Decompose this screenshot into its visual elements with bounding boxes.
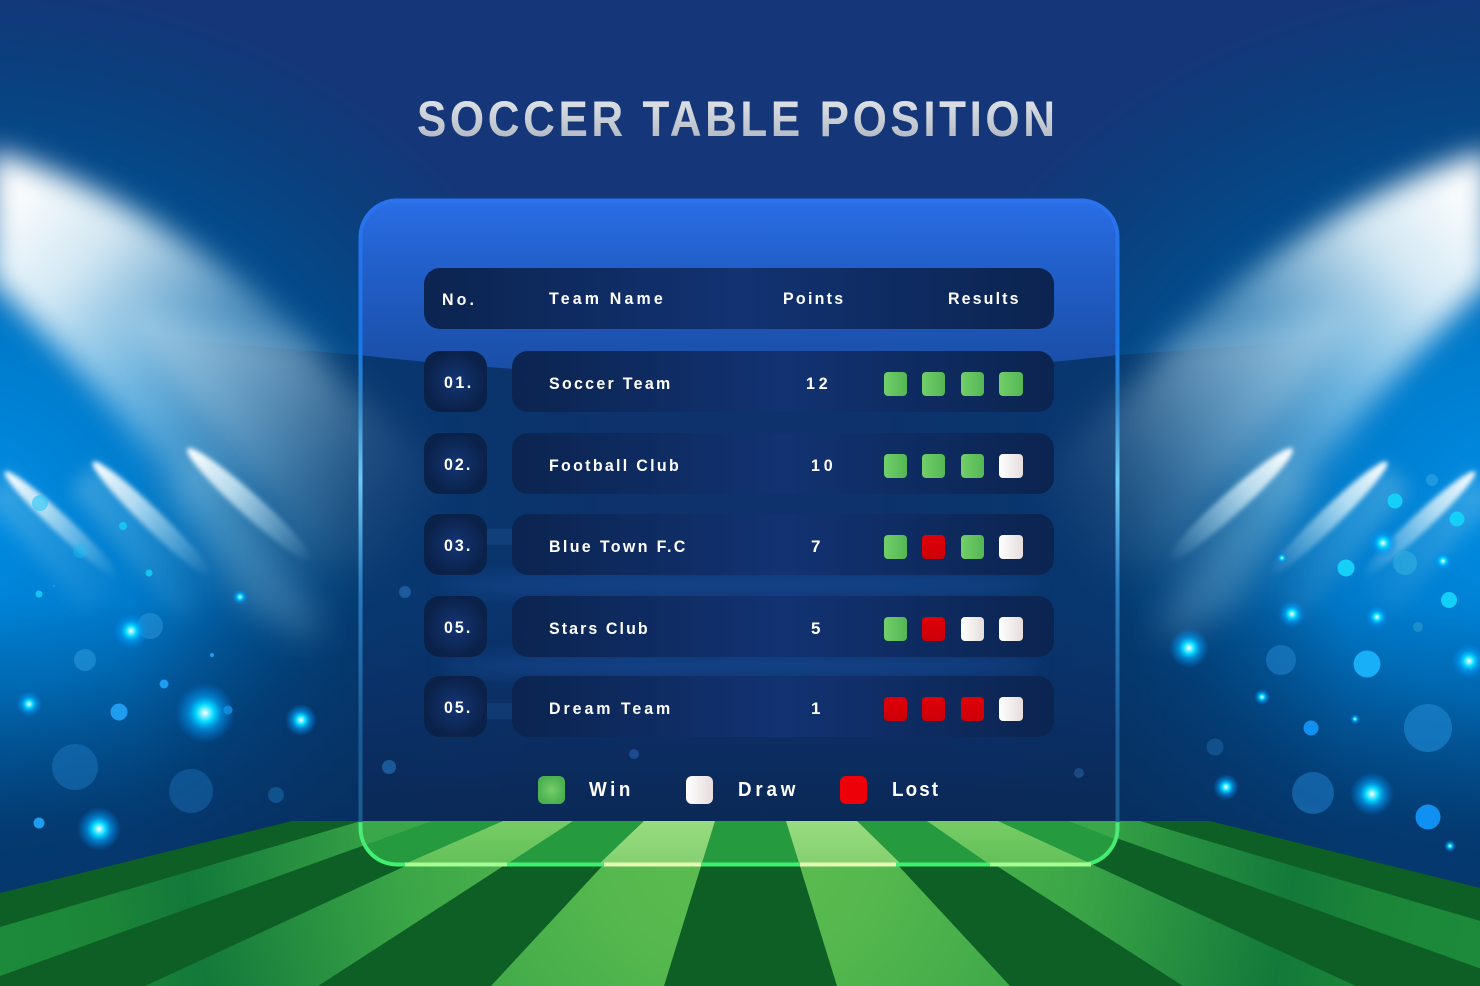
right floodlight beams bbox=[1040, 150, 1480, 650]
right crowd lights bbox=[1169, 474, 1480, 852]
table header: Results bbox=[948, 290, 1018, 308]
legend: Win bbox=[589, 778, 630, 801]
row 3: Blue Town F.C: Blue Town F.C bbox=[549, 538, 685, 556]
row 1: Soccer Team: 12 bbox=[806, 375, 828, 393]
row 1: Soccer Team: Soccer Team bbox=[549, 375, 670, 393]
row 3: Blue Town F.C bbox=[424, 514, 1054, 575]
row 2: Football Club bbox=[424, 433, 1054, 494]
table header: Team Name bbox=[549, 290, 663, 308]
left crowd lights bbox=[16, 495, 317, 851]
row 5: Dream Team: 05. bbox=[444, 699, 470, 717]
row 5: Dream Team: Dream Team bbox=[549, 700, 670, 718]
table header: No. bbox=[442, 291, 474, 309]
table header bbox=[424, 268, 1054, 329]
title: SOCCER TABLE POSITION bbox=[417, 90, 1055, 147]
row 5: Dream Team bbox=[424, 676, 1054, 737]
row 2: Football Club: Football Club bbox=[549, 457, 679, 475]
legend: Lost bbox=[892, 778, 939, 801]
row 4: Stars Club bbox=[424, 596, 1054, 657]
row 2: Football Club: 02. bbox=[444, 456, 470, 474]
row 2: Football Club: 10 bbox=[811, 457, 833, 475]
row 5: Dream Team: 1 bbox=[811, 699, 820, 718]
row 4: Stars Club: 5 bbox=[811, 619, 820, 638]
row 1: Soccer Team bbox=[424, 351, 1054, 412]
row 3: Blue Town F.C: 03. bbox=[444, 537, 470, 555]
table header: Points bbox=[783, 290, 843, 308]
legend: Draw bbox=[738, 778, 796, 801]
glass panel bbox=[358, 198, 1120, 866]
row 4: Stars Club: Stars Club bbox=[549, 620, 648, 638]
football pitch bbox=[0, 815, 1480, 986]
panel dots bbox=[382, 586, 1084, 778]
row 4: Stars Club: 05. bbox=[444, 619, 470, 637]
row 3: Blue Town F.C: 7 bbox=[811, 537, 820, 556]
left floodlight beams bbox=[0, 150, 440, 650]
legend bbox=[538, 776, 939, 804]
row 1: Soccer Team: 01. bbox=[444, 374, 471, 392]
